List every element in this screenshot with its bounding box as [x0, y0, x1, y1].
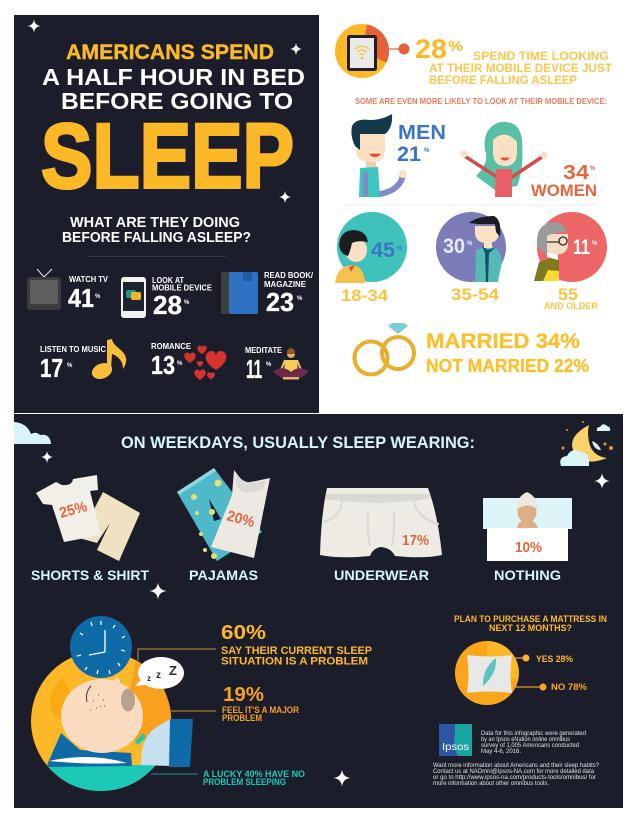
text block: source note: May 4-6, 2016. — [481, 749, 521, 755]
subheading: what are they doing — [62, 215, 251, 246]
activity: romance — [151, 341, 226, 380]
icon: woman illustration — [460, 122, 548, 197]
activity: look at mobile device — [121, 275, 212, 320]
age group: 18-34: % — [397, 246, 403, 252]
callout: 28 percent mobile device: 28 — [415, 34, 447, 64]
clothing: nothing — [483, 492, 572, 583]
text block: source note — [481, 731, 586, 755]
icon: pillow — [47, 719, 193, 767]
icon: shorts — [79, 492, 140, 561]
age group: 35-54: 30 — [443, 235, 465, 258]
callout: 28 percent mobile device: % — [448, 38, 463, 55]
activity: look at mobile device: % — [184, 300, 190, 306]
activity: look at mobile device: 28 — [153, 290, 182, 320]
icon: meditating figure — [273, 348, 309, 380]
clothing: pajamas: 20% — [225, 507, 256, 531]
age group: 35-54: 35-54 — [451, 285, 500, 304]
demographic: men — [351, 114, 446, 197]
text block: source note: by an Ipsos eNation online omnibus — [481, 737, 570, 743]
activity: read book or magazine — [221, 271, 314, 317]
clothing: pajamas — [177, 468, 270, 583]
activity: meditate — [245, 345, 309, 384]
icon: middle aged man — [469, 216, 502, 282]
stat: 60 percent: SITUATION IS A PROBLEM — [221, 656, 368, 668]
text block: more information — [433, 763, 600, 787]
icon: older person — [534, 222, 568, 281]
clothing: shorts and shirt: 25% — [58, 498, 89, 522]
stat: 60 percent: 60% — [221, 622, 266, 644]
age group: 55 and older — [534, 212, 607, 312]
activity: read book or magazine: % — [297, 296, 303, 302]
icon: star bottom — [334, 770, 350, 786]
activity: read book or magazine: MAGAZINE — [264, 280, 307, 289]
stat: 19 percent: FEEL IT'S A MAJOR — [222, 705, 299, 715]
age group: 55 and older: AND OLDER — [544, 301, 598, 312]
demographic: men: MEN — [398, 122, 446, 144]
icon: book — [221, 272, 258, 314]
title: BEFORE GOING TO — [61, 88, 293, 114]
subheading: what are they doing: WHAT ARE THEY DOING — [70, 215, 240, 231]
chart: mattress purchase pie: NO 78% — [551, 682, 588, 693]
age group: 35-54: % — [467, 241, 473, 247]
clothing: nothing: 10% — [515, 540, 542, 556]
age group: 18-34: 18-34 — [341, 286, 389, 305]
text block: more information: Want more information about Americans and their sleep habits? — [433, 763, 600, 769]
icon: wedding rings — [354, 323, 414, 374]
icon: pajama pants — [177, 468, 262, 561]
icon: tank top — [211, 470, 270, 558]
demographic: women — [460, 122, 597, 200]
activity: read book or magazine: READ BOOK/ — [264, 271, 314, 280]
callout: 28 percent mobile device: SPEND TIME LOOKING — [473, 49, 609, 63]
title: AMERICANS SPEND — [66, 41, 274, 64]
activity: watch tv — [27, 269, 108, 313]
text block: more information: or go to http://www.ipsos-na.com/products-tools/omnibus/ for — [433, 775, 596, 781]
icon: speech bubble with z's — [135, 657, 184, 689]
callout: 28 percent mobile device: BEFORE FALLING ASLEEP — [429, 73, 577, 87]
icon: man illustration — [351, 114, 407, 197]
icon: phone — [121, 277, 146, 318]
stat: 19 percent: 19% — [223, 684, 264, 706]
text block: source note: Data for this infographic were generated — [481, 731, 586, 737]
clothing: shorts and shirt: SHORTS & SHIRT — [31, 567, 149, 583]
subheading: more likely: SOME ARE EVEN MORE LIKELY TO LOOK AT THEIR MOBILE DEVICE: — [355, 96, 607, 106]
logo: ipsos — [439, 724, 472, 756]
marital status — [354, 323, 589, 376]
marital status: NOT MARRIED 22% — [426, 356, 589, 376]
activity: look at mobile device: MOBILE DEVICE — [152, 282, 212, 292]
demographic: women: WOMEN — [531, 181, 597, 200]
activity: look at mobile device: LOOK AT — [152, 275, 185, 285]
stat: lucky 40 percent — [151, 769, 305, 787]
callout: 28 percent mobile device — [335, 24, 613, 87]
clothing: pajamas: PAJAMAS — [189, 567, 258, 583]
marital status: MARRIED 34% — [426, 330, 580, 353]
icon: moon and clouds — [560, 421, 613, 466]
title — [41, 41, 305, 208]
icon: star beside heading — [290, 43, 302, 55]
icon: speech bubble with z's: z — [156, 670, 161, 681]
text block: more information: more information about other omnibus tools. — [433, 781, 549, 787]
text block: more information: Contact us at NAOmni@Ipsos-NA.com for more detailed data — [433, 769, 595, 775]
icon: cloud top left — [14, 422, 51, 444]
clothing: shorts and shirt — [31, 475, 149, 583]
icon: shirt — [36, 475, 101, 542]
demographic: men: 21 — [397, 143, 421, 166]
icon: star top left — [28, 20, 40, 32]
demographic: men: % — [424, 148, 430, 154]
stat: lucky 40 percent: A LUCKY 40% HAVE NO — [203, 769, 305, 779]
callout: 28 percent mobile device: AT THEIR MOBILE DEVICE JUST — [429, 61, 613, 75]
activity: meditate: 11 — [246, 354, 262, 384]
title: A HALF HOUR IN BED — [42, 64, 305, 90]
age group: 18-34 — [335, 212, 407, 305]
icon: star left — [41, 451, 53, 463]
age group: 35-54 — [436, 212, 506, 304]
icon: television — [27, 269, 61, 310]
icon: speech bubble with z's: z — [147, 674, 151, 683]
icon: hearts — [184, 346, 226, 380]
chart: mattress purchase pie: YES 28% — [536, 654, 573, 665]
activity: meditate: MEDITATE — [245, 345, 282, 355]
icon: music note — [89, 339, 126, 382]
activity: romance: 13 — [151, 350, 175, 380]
activity: romance: ROMANCE — [151, 341, 191, 351]
icon: young man — [335, 230, 368, 283]
age group: 18-34: 45 — [371, 239, 395, 262]
clothing: nothing: NOTHING — [494, 567, 561, 583]
age group: 55 and older: 11 — [573, 236, 590, 259]
activity: watch tv: WATCH TV — [69, 274, 108, 284]
chart: mattress purchase pie: NEXT 12 MONTHS? — [489, 623, 572, 633]
clothing: underwear: UNDERWEAR — [334, 567, 429, 583]
chart: mattress purchase pie: PLAN TO PURCHASE A MATTRESS IN — [454, 614, 607, 624]
icon: star right — [594, 473, 610, 489]
stat: 60 percent: SAY THEIR CURRENT SLEEP — [221, 645, 372, 657]
age group: 55 and older: % — [592, 241, 598, 247]
text block: source note: survey of 1,005 Americans conducted — [481, 743, 579, 749]
icon: clock — [70, 616, 132, 678]
activity: listen to music: % — [67, 363, 73, 369]
stat: lucky 40 percent: PROBLEM SLEEPING — [203, 777, 286, 787]
icon: sleeping head — [50, 677, 143, 753]
activity: meditate: % — [266, 362, 272, 368]
stat: 60 percent — [138, 622, 372, 668]
activity: watch tv: 41 — [68, 283, 94, 313]
stat: 19 percent — [171, 684, 299, 723]
panel: dark weekday wear and sleep problems panel — [14, 414, 623, 808]
icon: pillow with feather — [467, 655, 512, 693]
icon: speech bubble with z's: Z — [169, 663, 177, 678]
icon: star under sleep — [279, 191, 291, 203]
heading: weekdays: ON WEEKDAYS, USUALLY SLEEP WEARING: — [121, 434, 475, 452]
clothing: underwear: 17% — [402, 533, 429, 549]
logo: ipsos: Ipsos — [442, 742, 469, 753]
icon: person in bed — [483, 492, 572, 561]
demographic: women: 34 — [563, 162, 590, 184]
age group: 55 and older: 55 — [558, 285, 578, 304]
activity: romance: % — [177, 361, 183, 367]
icon: large star — [150, 582, 166, 600]
illustration: sleeper with clock — [31, 616, 193, 791]
activity: watch tv: % — [95, 294, 101, 300]
activity: listen to music — [40, 339, 126, 383]
demographic: women: % — [590, 166, 596, 172]
subheading: what are they doing: BEFORE FALLING ASLEEP? — [62, 230, 251, 246]
activity: listen to music: 17 — [40, 353, 63, 383]
activity: listen to music: LISTEN TO MUSIC — [40, 344, 106, 354]
icon: underwear — [320, 488, 442, 557]
activity: read book or magazine: 23 — [266, 287, 294, 317]
title: SLEEP — [41, 106, 294, 208]
stat: 19 percent: PROBLEM — [222, 713, 262, 723]
chart: mattress purchase pie — [454, 614, 607, 705]
panel: dark intro panel — [14, 15, 319, 413]
icon: tablet pie — [335, 24, 389, 78]
clothing: underwear — [320, 488, 442, 583]
